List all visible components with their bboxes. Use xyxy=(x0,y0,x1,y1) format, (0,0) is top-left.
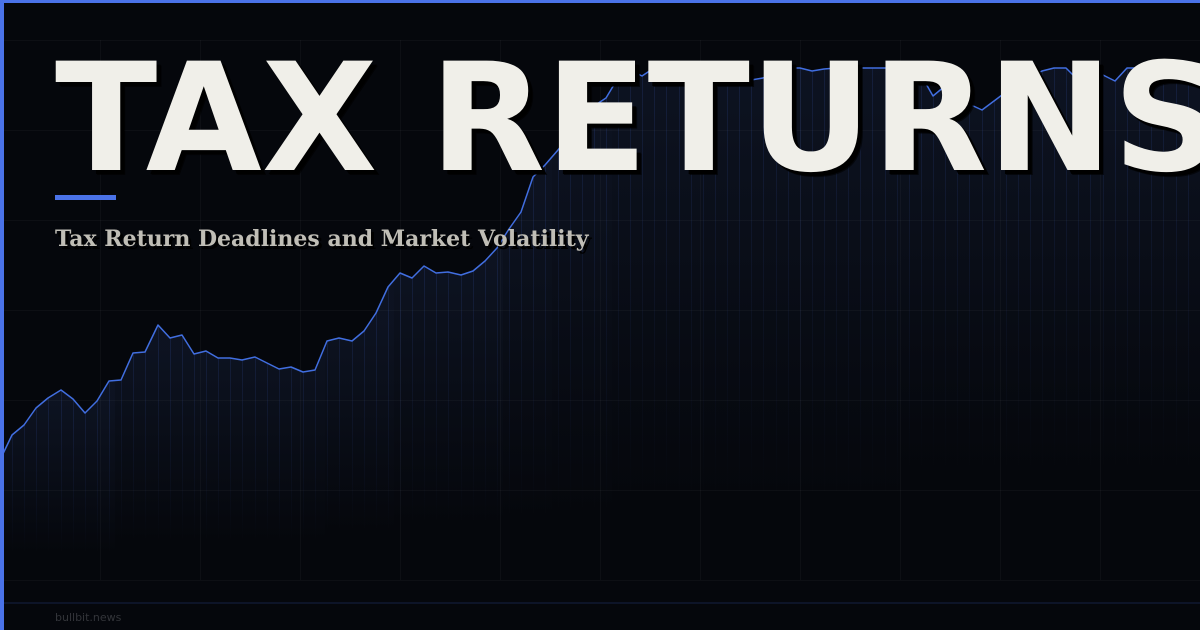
column lines xyxy=(12,68,1188,553)
footer source: bullbit.news xyxy=(55,611,121,624)
footer divider xyxy=(4,602,1200,604)
title: TAX RETURNS xyxy=(55,32,1200,206)
top accent bar xyxy=(0,0,1200,3)
area fill xyxy=(4,68,1200,496)
title underline accent xyxy=(55,195,116,200)
line series xyxy=(0,68,1200,460)
subtitle: Tax Return Deadlines and Market Volatility xyxy=(55,226,589,252)
left accent bar xyxy=(0,0,4,630)
